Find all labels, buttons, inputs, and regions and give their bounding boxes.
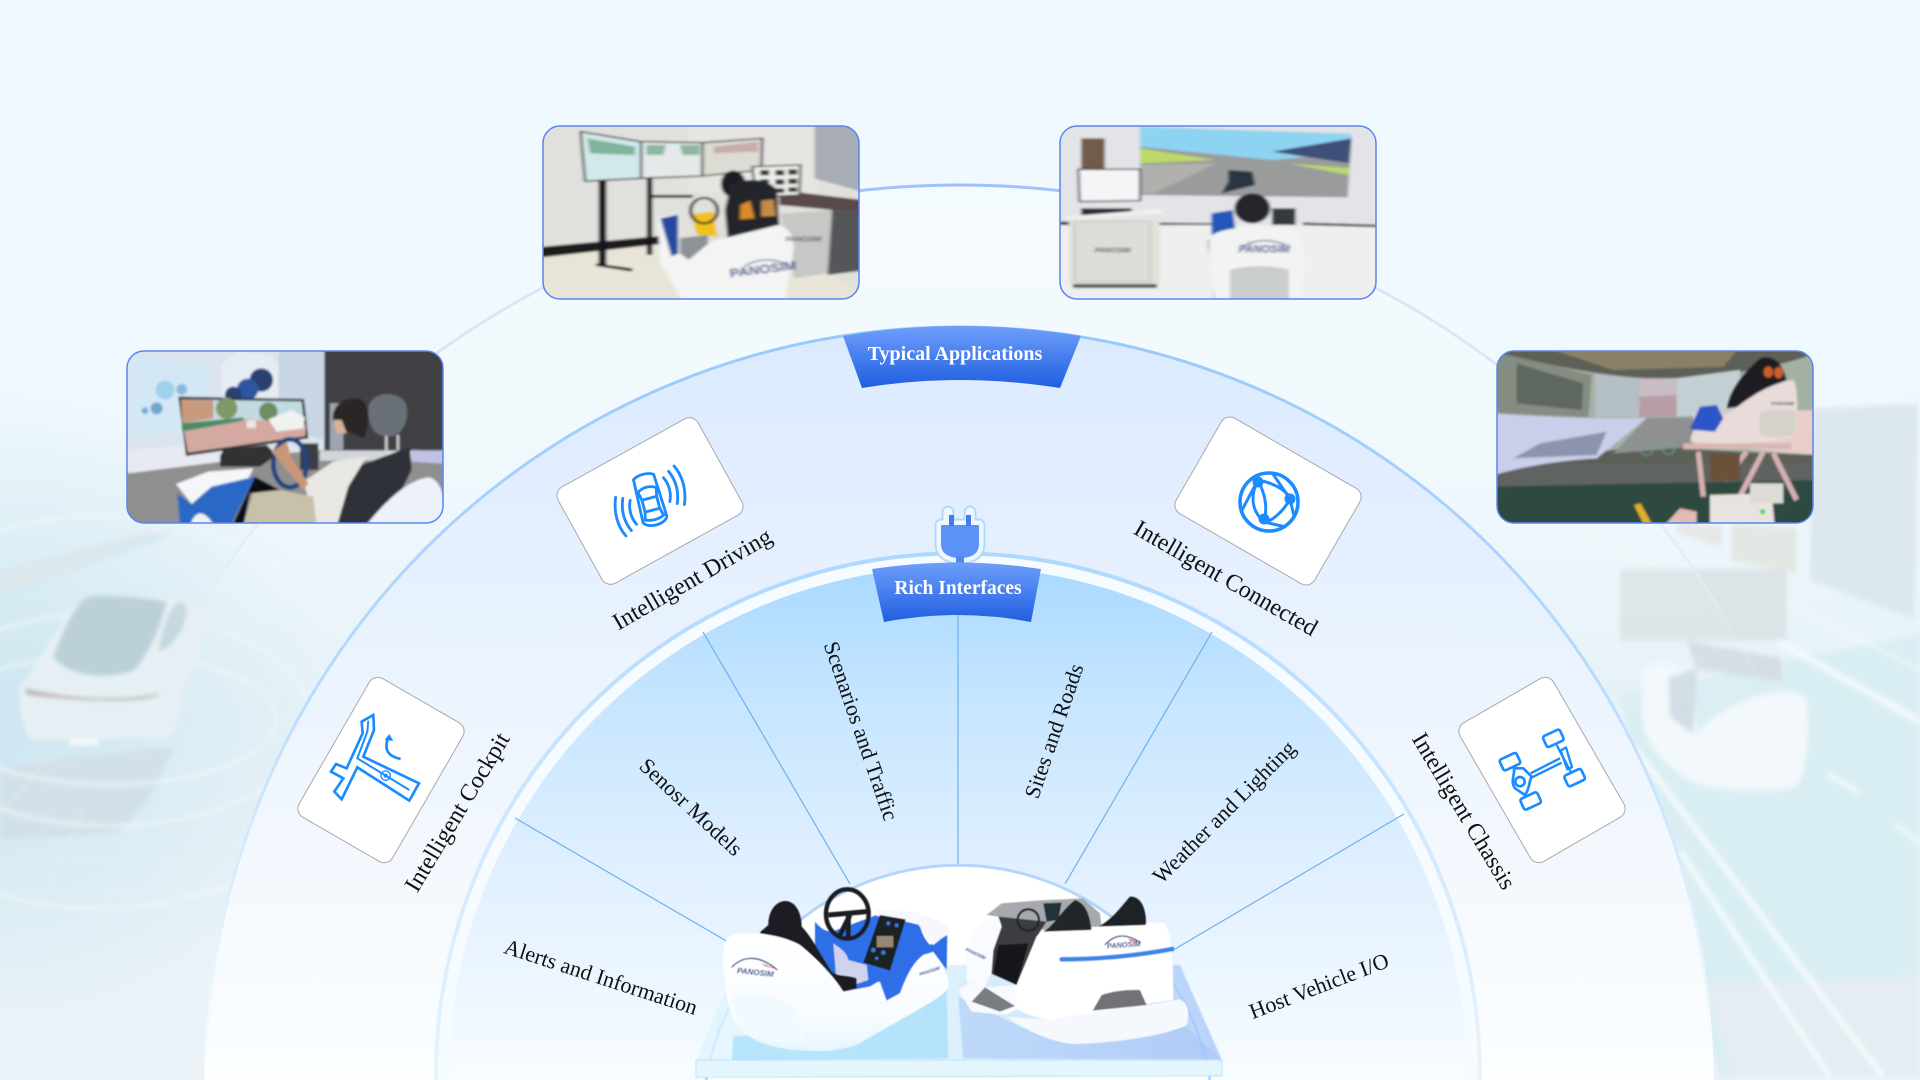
background: left autonomous car on road	[0, 516, 367, 919]
label: Intelligent Chassis: Intelligent Chassis	[1406, 728, 1520, 894]
simulator: right white with blue stripe	[958, 897, 1188, 1044]
label: Host Vehicle I/O: Host Vehicle I/O	[1246, 948, 1392, 1024]
icon: connected globe	[1240, 473, 1298, 531]
background: right simulator and road ghost scene	[1577, 403, 1919, 1077]
panel: rich interfaces sector	[436, 553, 1480, 1080]
icon: road junction	[331, 715, 419, 801]
icon: power plug	[941, 512, 979, 565]
photo: motion-platform simulator with curved screen: PANOSIM	[1771, 401, 1795, 407]
simulator: left white and blue	[723, 889, 950, 1051]
label: Scenarios and Traffic: Scenarios and Traffic	[819, 638, 904, 824]
photo: wall-screen simulator: PANOSIM	[1238, 244, 1291, 256]
photo: motion-platform simulator with curved screen	[1493, 347, 1817, 528]
photo: triple-screen simulator	[537, 123, 868, 302]
photo: curved monitor simulator with driver	[123, 347, 448, 528]
outer connector arc	[64, 185, 1854, 1080]
icon: car with sensor waves	[608, 465, 692, 537]
badge: Rich Interfaces	[872, 562, 1041, 622]
photo: wall-screen simulator	[1053, 123, 1384, 302]
simulator: left white and blue: PANOSIM	[737, 966, 774, 979]
label: Intelligent Cockpit: Intelligent Cockpit	[400, 728, 516, 897]
photo: wall-screen simulator: PANOSIM	[1095, 246, 1131, 255]
simulator: right white with blue stripe: PANOSIM	[965, 947, 986, 960]
simulator: left white and blue: PANOSIM	[919, 966, 941, 977]
label: Sites and Roads: Sites and Roads	[1019, 660, 1088, 801]
label: Intelligent Connected: Intelligent Connected	[1129, 516, 1322, 642]
product: two PanoSim simulators on a glass platform	[696, 889, 1222, 1077]
label: Alerts and Information: Alerts and Information	[501, 934, 701, 1020]
badge: Typical Applications: Typical Applications	[868, 343, 1043, 365]
label: Intelligent Driving: Intelligent Driving	[608, 524, 777, 636]
card: Intelligent Driving	[553, 414, 747, 588]
card: Intelligent Chassis	[1455, 674, 1629, 866]
photo: triple-screen simulator: PANOSIM	[785, 235, 822, 244]
badge: Rich Interfaces: Rich Interfaces	[894, 578, 1022, 599]
simulator: right white with blue stripe: PANOSIM	[1107, 939, 1142, 950]
label: Senosr Models: Senosr Models	[635, 753, 748, 861]
platform	[696, 965, 1222, 1077]
label: Weather and Lighting: Weather and Lighting	[1147, 735, 1300, 888]
icon: vehicle chassis	[1499, 729, 1586, 810]
panel: typical applications ring	[206, 327, 1712, 1080]
badge: Typical Applications	[843, 326, 1081, 388]
photo: triple-screen simulator: PANOSIM	[727, 259, 799, 280]
card: Intelligent Connected	[1171, 413, 1365, 589]
card: Intelligent Cockpit	[294, 674, 468, 866]
